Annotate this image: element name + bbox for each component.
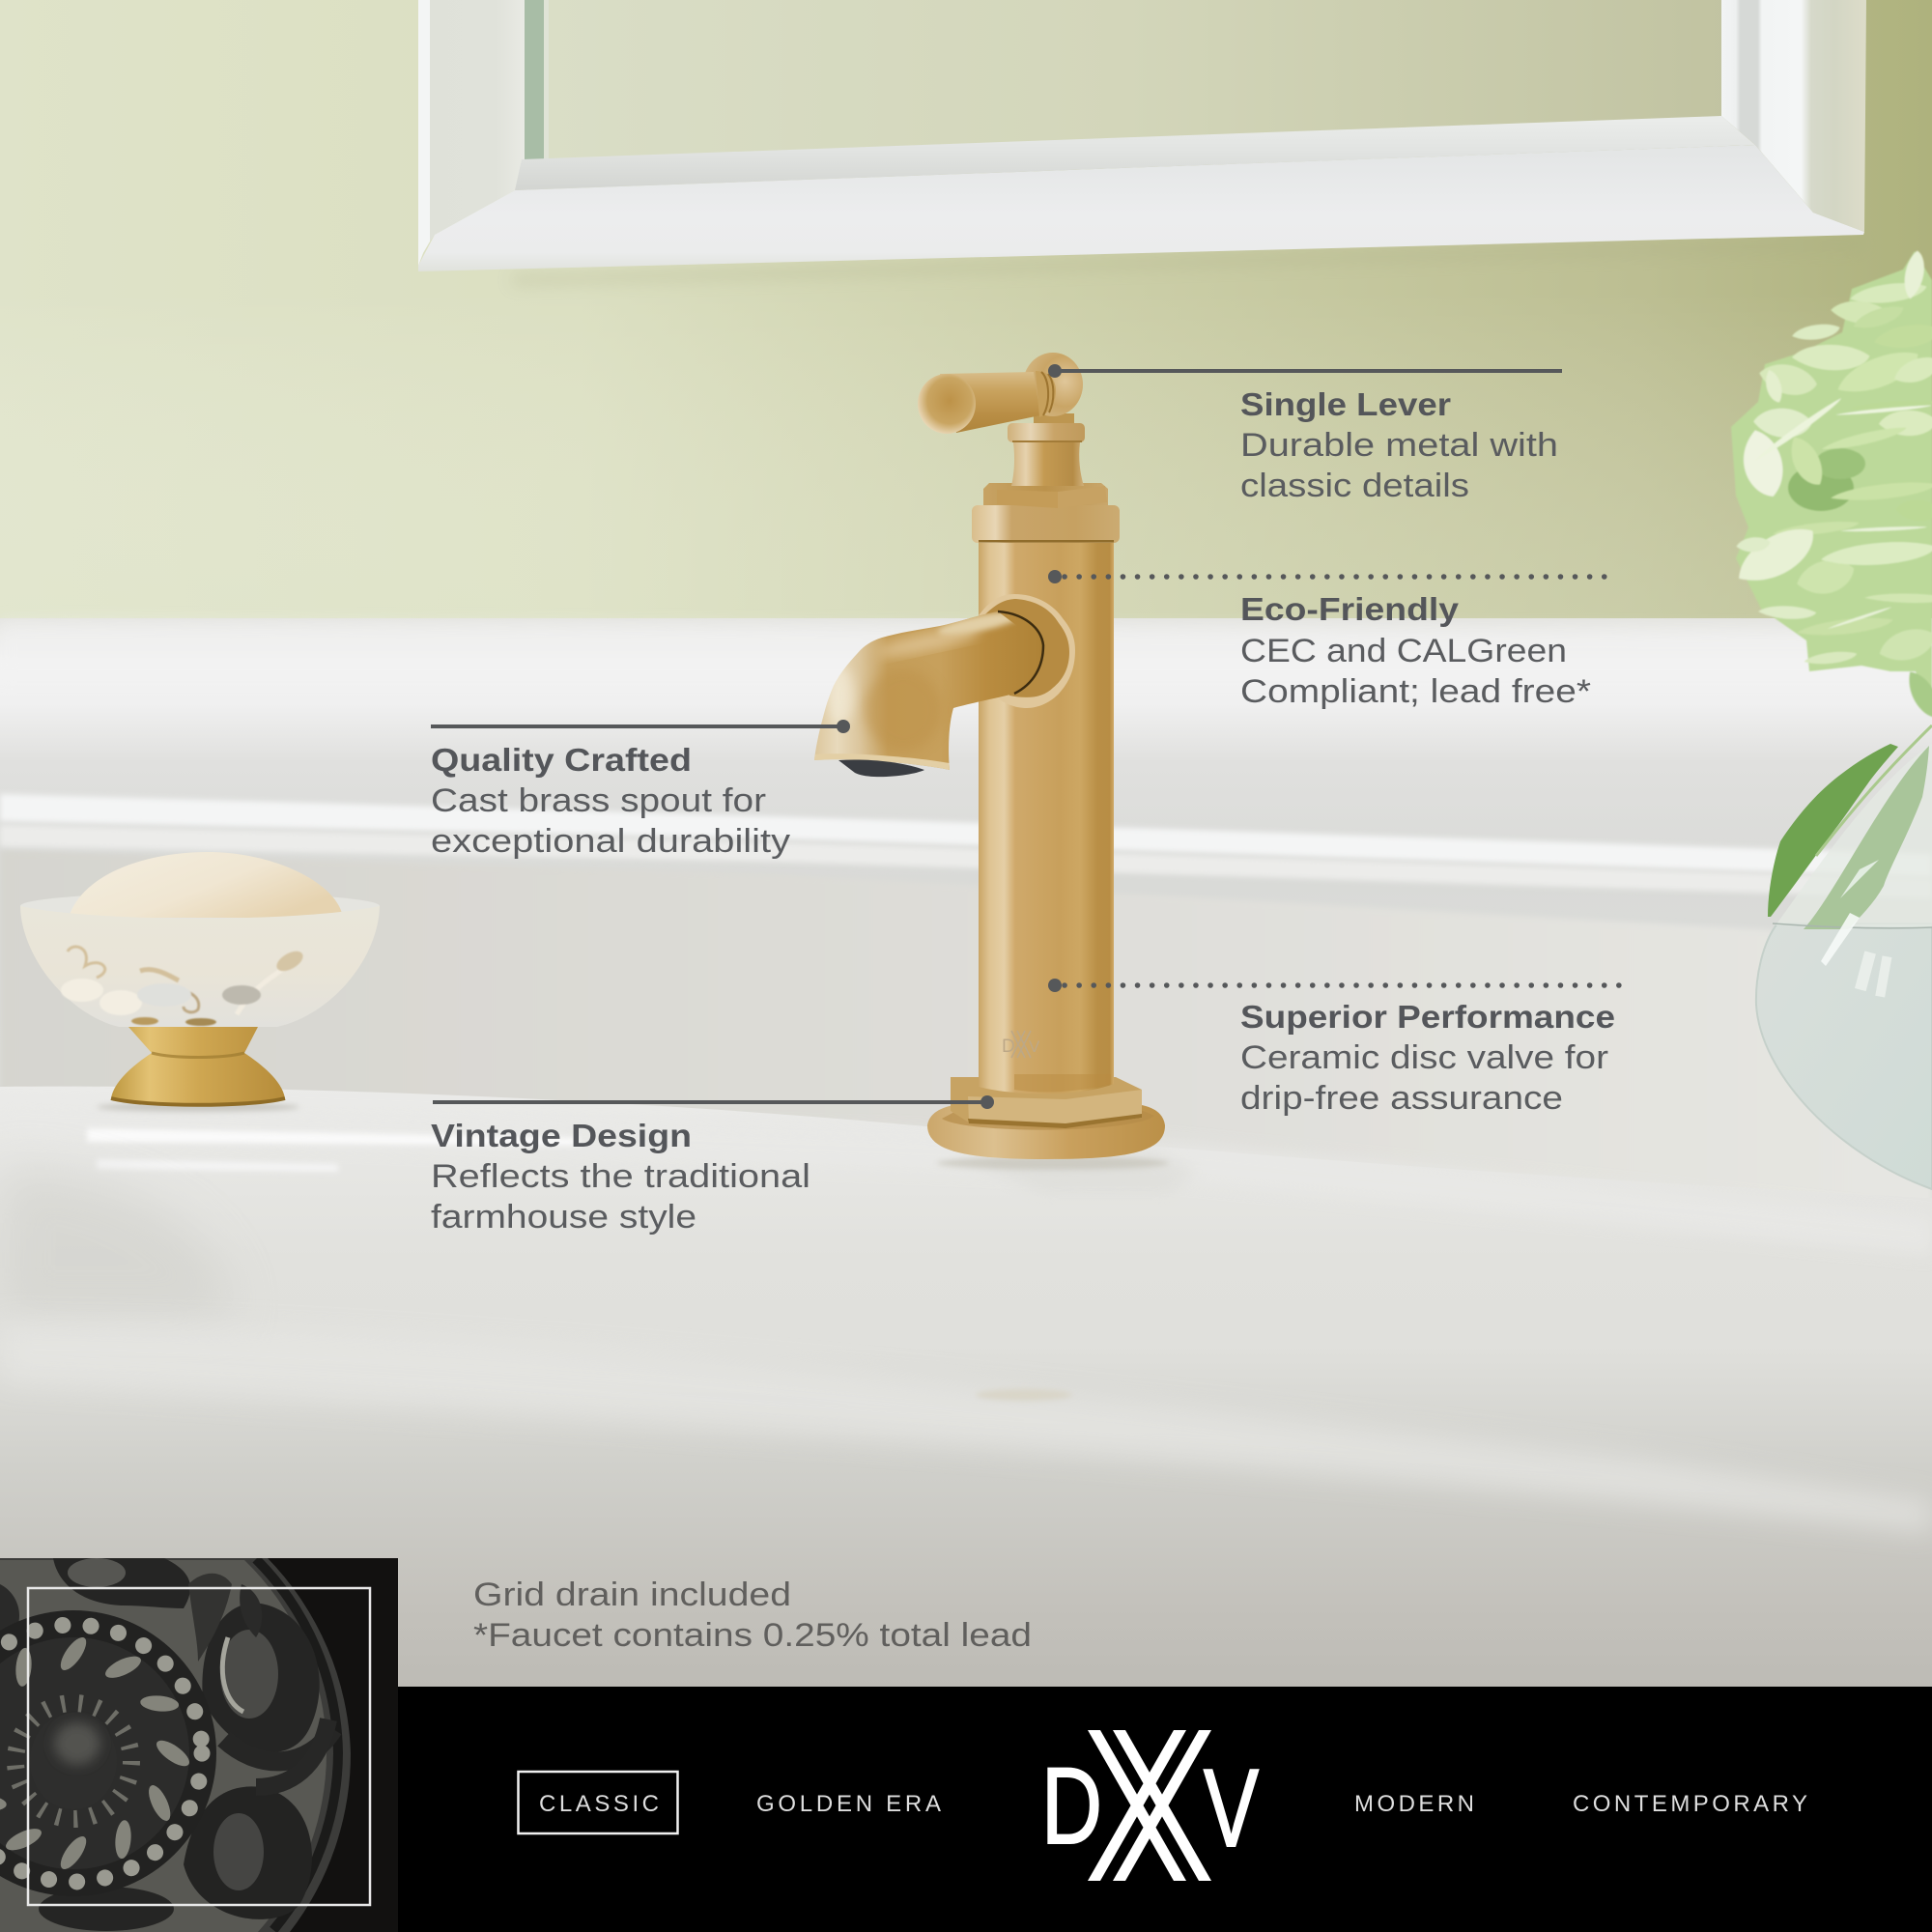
callout: vintage design: Vintage Design [431, 1118, 692, 1153]
bead ring band [0, 1610, 216, 1896]
callout: vintage design: Reflects the traditional [431, 1158, 810, 1195]
vase with leaf [1756, 725, 1932, 1189]
tiny logo: D [1002, 1037, 1015, 1057]
connecting scroll [224, 1729, 333, 1761]
style label: golden era: GOLDEN ERA [756, 1791, 941, 1817]
sink counter and basin [0, 1087, 1932, 1700]
glass highlights [1821, 913, 1860, 966]
footnote text: *Faucet contains 0.25% total lead [473, 1617, 1032, 1654]
wall background [0, 0, 1932, 638]
callout: quality crafted: Quality Crafted [431, 742, 692, 778]
tiny logo: V [1029, 1037, 1040, 1056]
white square frame [28, 1588, 370, 1905]
swirl bottom right [184, 1786, 312, 1919]
callout: quality crafted: exceptional durability [431, 823, 790, 860]
gold foot [111, 1027, 285, 1105]
base disc [927, 1103, 1165, 1159]
sun rays [15, 1703, 131, 1819]
soap dish [20, 852, 380, 1112]
escutcheon ring [979, 594, 1075, 708]
molding and backsplash [0, 618, 1932, 1275]
mirror with white frame [418, 0, 1866, 286]
lever [940, 372, 1040, 433]
spout [814, 607, 1043, 773]
leaf behind glass [1804, 746, 1929, 929]
callout: vintage design: farmhouse style [431, 1199, 696, 1236]
footnote text [473, 1577, 1032, 1654]
style label: contemporary: CONTEMPORARY [1573, 1791, 1807, 1817]
callout: superior performance: Superior Performance [1240, 999, 1615, 1035]
callout: superior performance [1048, 979, 1622, 1117]
callout: eco-friendly: Compliant; lead free* [1240, 673, 1591, 710]
callout: single lever: Single Lever [1240, 386, 1451, 422]
bowl floral pattern [61, 947, 306, 1026]
handle hub [1023, 353, 1083, 416]
soap bar [69, 852, 343, 918]
inner floral leaves [0, 1634, 193, 1873]
style label: classic with box [518, 1772, 678, 1833]
callout: eco-friendly: Eco-Friendly [1240, 591, 1460, 627]
tiny logo [1002, 1031, 1040, 1058]
callout: eco-friendly [1048, 570, 1605, 710]
DXV logo: V [1204, 1747, 1259, 1870]
hex base plate [951, 1077, 1142, 1127]
callout: quality crafted: Cast brass spout for [431, 782, 766, 819]
hex collar top [983, 483, 1108, 505]
DXV logo: D [1041, 1746, 1102, 1866]
top scrolls [53, 1558, 190, 1608]
callout: vintage design [431, 1095, 994, 1236]
collar [972, 505, 1120, 543]
style label: classic with box: CLASSIC [539, 1791, 659, 1817]
glass vase [1756, 923, 1932, 1189]
footer bar [398, 1687, 1932, 1932]
bowl rim back [20, 893, 380, 920]
central dome [30, 1713, 117, 1809]
aerator [838, 759, 924, 777]
callout: superior performance: Ceramic disc valve for [1240, 1039, 1608, 1076]
column [979, 536, 1114, 1079]
callout: single lever [1048, 364, 1562, 504]
callout: superior performance: drip-free assurance [1240, 1080, 1563, 1117]
callout: single lever: Durable metal with [1240, 427, 1558, 464]
footnote text: Grid drain included [473, 1577, 791, 1613]
frosted bowl [20, 906, 380, 1027]
faucet [814, 353, 1169, 1170]
callout: quality crafted [431, 720, 850, 860]
green leaf [1768, 744, 1898, 917]
swirl top right [202, 1604, 320, 1752]
DXV logo [1041, 1730, 1259, 1881]
drain detail panel [0, 1558, 398, 1932]
neck [1011, 442, 1084, 486]
hydrangea flower [1728, 249, 1932, 724]
callout: eco-friendly: CEC and CALGreen [1240, 633, 1567, 669]
style label: modern: MODERN [1354, 1791, 1474, 1817]
callout: single lever: classic details [1240, 468, 1469, 504]
